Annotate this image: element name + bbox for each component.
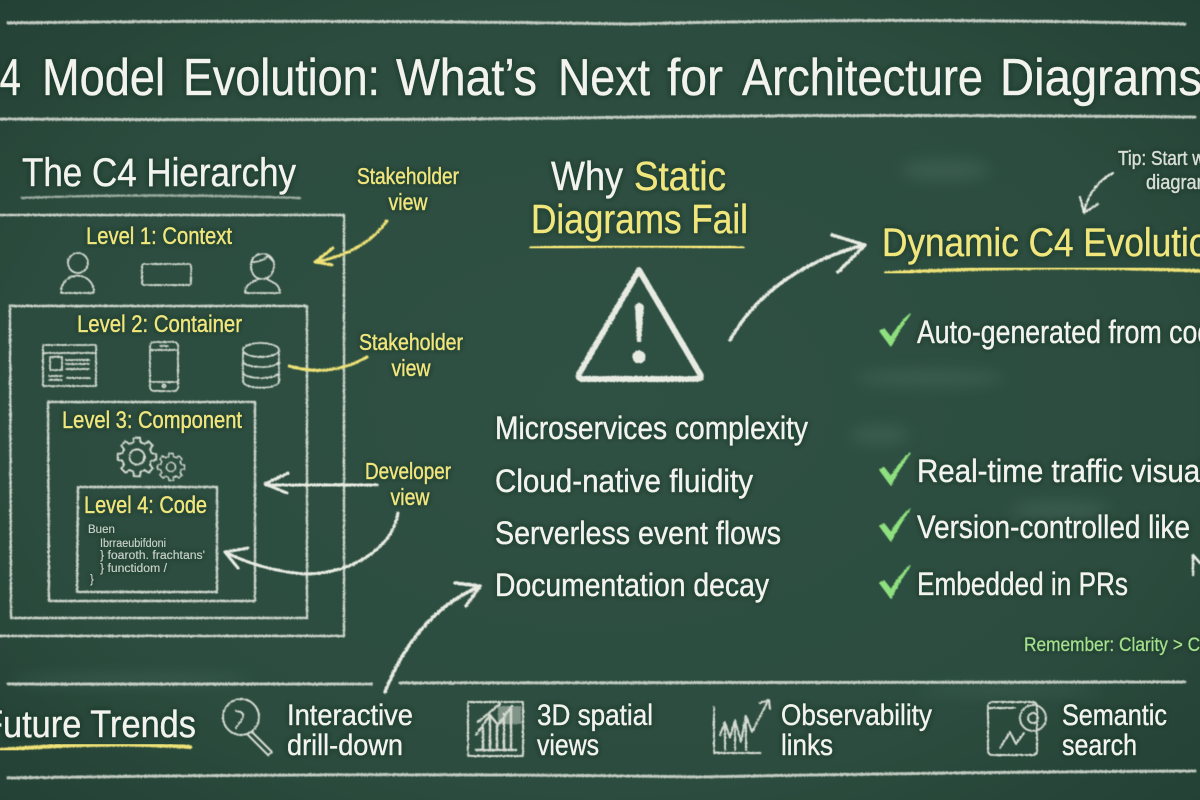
item labels: Observability <box>781 699 932 732</box>
item labels: search <box>1062 729 1137 762</box>
arrow: to dynamic C4 <box>730 235 865 340</box>
annotation labels: view <box>392 355 431 381</box>
list of failures: Cloud-native fluidity <box>495 463 753 499</box>
item labels: Semantic <box>1062 699 1167 732</box>
panel: future trends <box>0 682 1195 778</box>
trend icons <box>223 699 1046 756</box>
heading: the C4 hierarchy: The C4 Hierarchy <box>22 151 296 195</box>
item labels: Interactive <box>287 699 413 732</box>
item labels: links <box>781 729 833 762</box>
heading underline <box>886 268 1200 273</box>
panel: dynamic C4 evolution <box>880 148 1200 656</box>
level labels <box>62 223 242 519</box>
level labels: Level 1: Context <box>86 223 232 250</box>
icon: browser window <box>43 345 96 386</box>
heading underline <box>0 745 190 750</box>
title rules <box>0 20 1195 120</box>
item labels: drill-down <box>287 729 403 762</box>
icon: magnifier <box>223 699 272 755</box>
arrow: to documentation decay <box>385 583 480 692</box>
panel: C4 hierarchy <box>0 151 344 636</box>
icon: 3D chart <box>468 702 523 756</box>
arrow: developer to level 3 <box>265 473 377 493</box>
level labels: Level 4: Code <box>84 492 207 519</box>
code snippet: } <box>90 574 94 586</box>
annotation labels: Developer <box>365 458 451 484</box>
title <box>0 49 1200 107</box>
annotation labels <box>357 163 463 510</box>
icon: observability chart <box>714 700 770 753</box>
arrow: stakeholder to level 1 <box>315 221 387 265</box>
title: Architecture <box>742 49 983 107</box>
rules <box>8 682 1195 778</box>
list of failures <box>495 410 808 603</box>
title: Evolution: <box>183 49 380 107</box>
item labels: 3D spatial <box>537 699 653 732</box>
arrow: tip <box>1080 173 1113 213</box>
check marks <box>880 314 910 598</box>
title: Model <box>42 49 165 107</box>
code snippet: } functidom / <box>100 563 168 575</box>
code snippet: } foaroth. frachtans' <box>100 550 205 562</box>
item labels: views <box>537 729 599 762</box>
icons <box>43 253 280 481</box>
item labels <box>287 699 1167 762</box>
icon: person with hair <box>245 254 280 293</box>
heading: Diagrams Fail <box>531 196 748 242</box>
icon: semantic search <box>988 702 1046 755</box>
check items: Embedded in PRs <box>917 566 1128 602</box>
heading: Why <box>551 153 623 199</box>
title: for <box>667 49 723 107</box>
icon: phone <box>150 342 178 391</box>
annotation labels: view <box>390 484 430 510</box>
code snippet <box>88 524 205 586</box>
icon: warning triangle <box>579 270 701 379</box>
annotation arrows <box>225 173 1200 692</box>
list of failures: Microservices complexity <box>495 410 808 446</box>
list of failures: Documentation decay <box>495 567 769 603</box>
arrow: developer to level 4 <box>225 513 398 574</box>
arrow: right edge fragment <box>1193 555 1200 575</box>
icon: gears <box>118 438 185 481</box>
checklist <box>880 314 1200 602</box>
panel: why static diagrams fail <box>495 153 808 603</box>
arrow: stakeholder to level 2 <box>289 357 367 370</box>
heading: Static <box>634 153 726 199</box>
tip note <box>1118 148 1200 194</box>
annotation labels: view <box>388 189 428 215</box>
code snippet: Ibrraeubifdoni <box>100 538 166 550</box>
code snippet: Buen <box>88 524 115 536</box>
annotation labels: Stakeholder <box>357 163 459 189</box>
icon: system box <box>142 264 191 285</box>
level labels: Level 3: Component <box>62 407 242 434</box>
heading <box>531 153 748 242</box>
icon: person <box>61 253 94 293</box>
title: Next <box>558 49 650 107</box>
list of failures: Serverless event flows <box>495 515 781 551</box>
nested level boxes <box>0 196 344 636</box>
title: What’s <box>396 49 537 107</box>
annotation labels: Stakeholder <box>359 329 463 355</box>
icon: database <box>243 343 279 388</box>
heading underline <box>531 246 743 248</box>
level labels: Level 2: Container <box>77 311 242 338</box>
check items <box>917 314 1200 602</box>
